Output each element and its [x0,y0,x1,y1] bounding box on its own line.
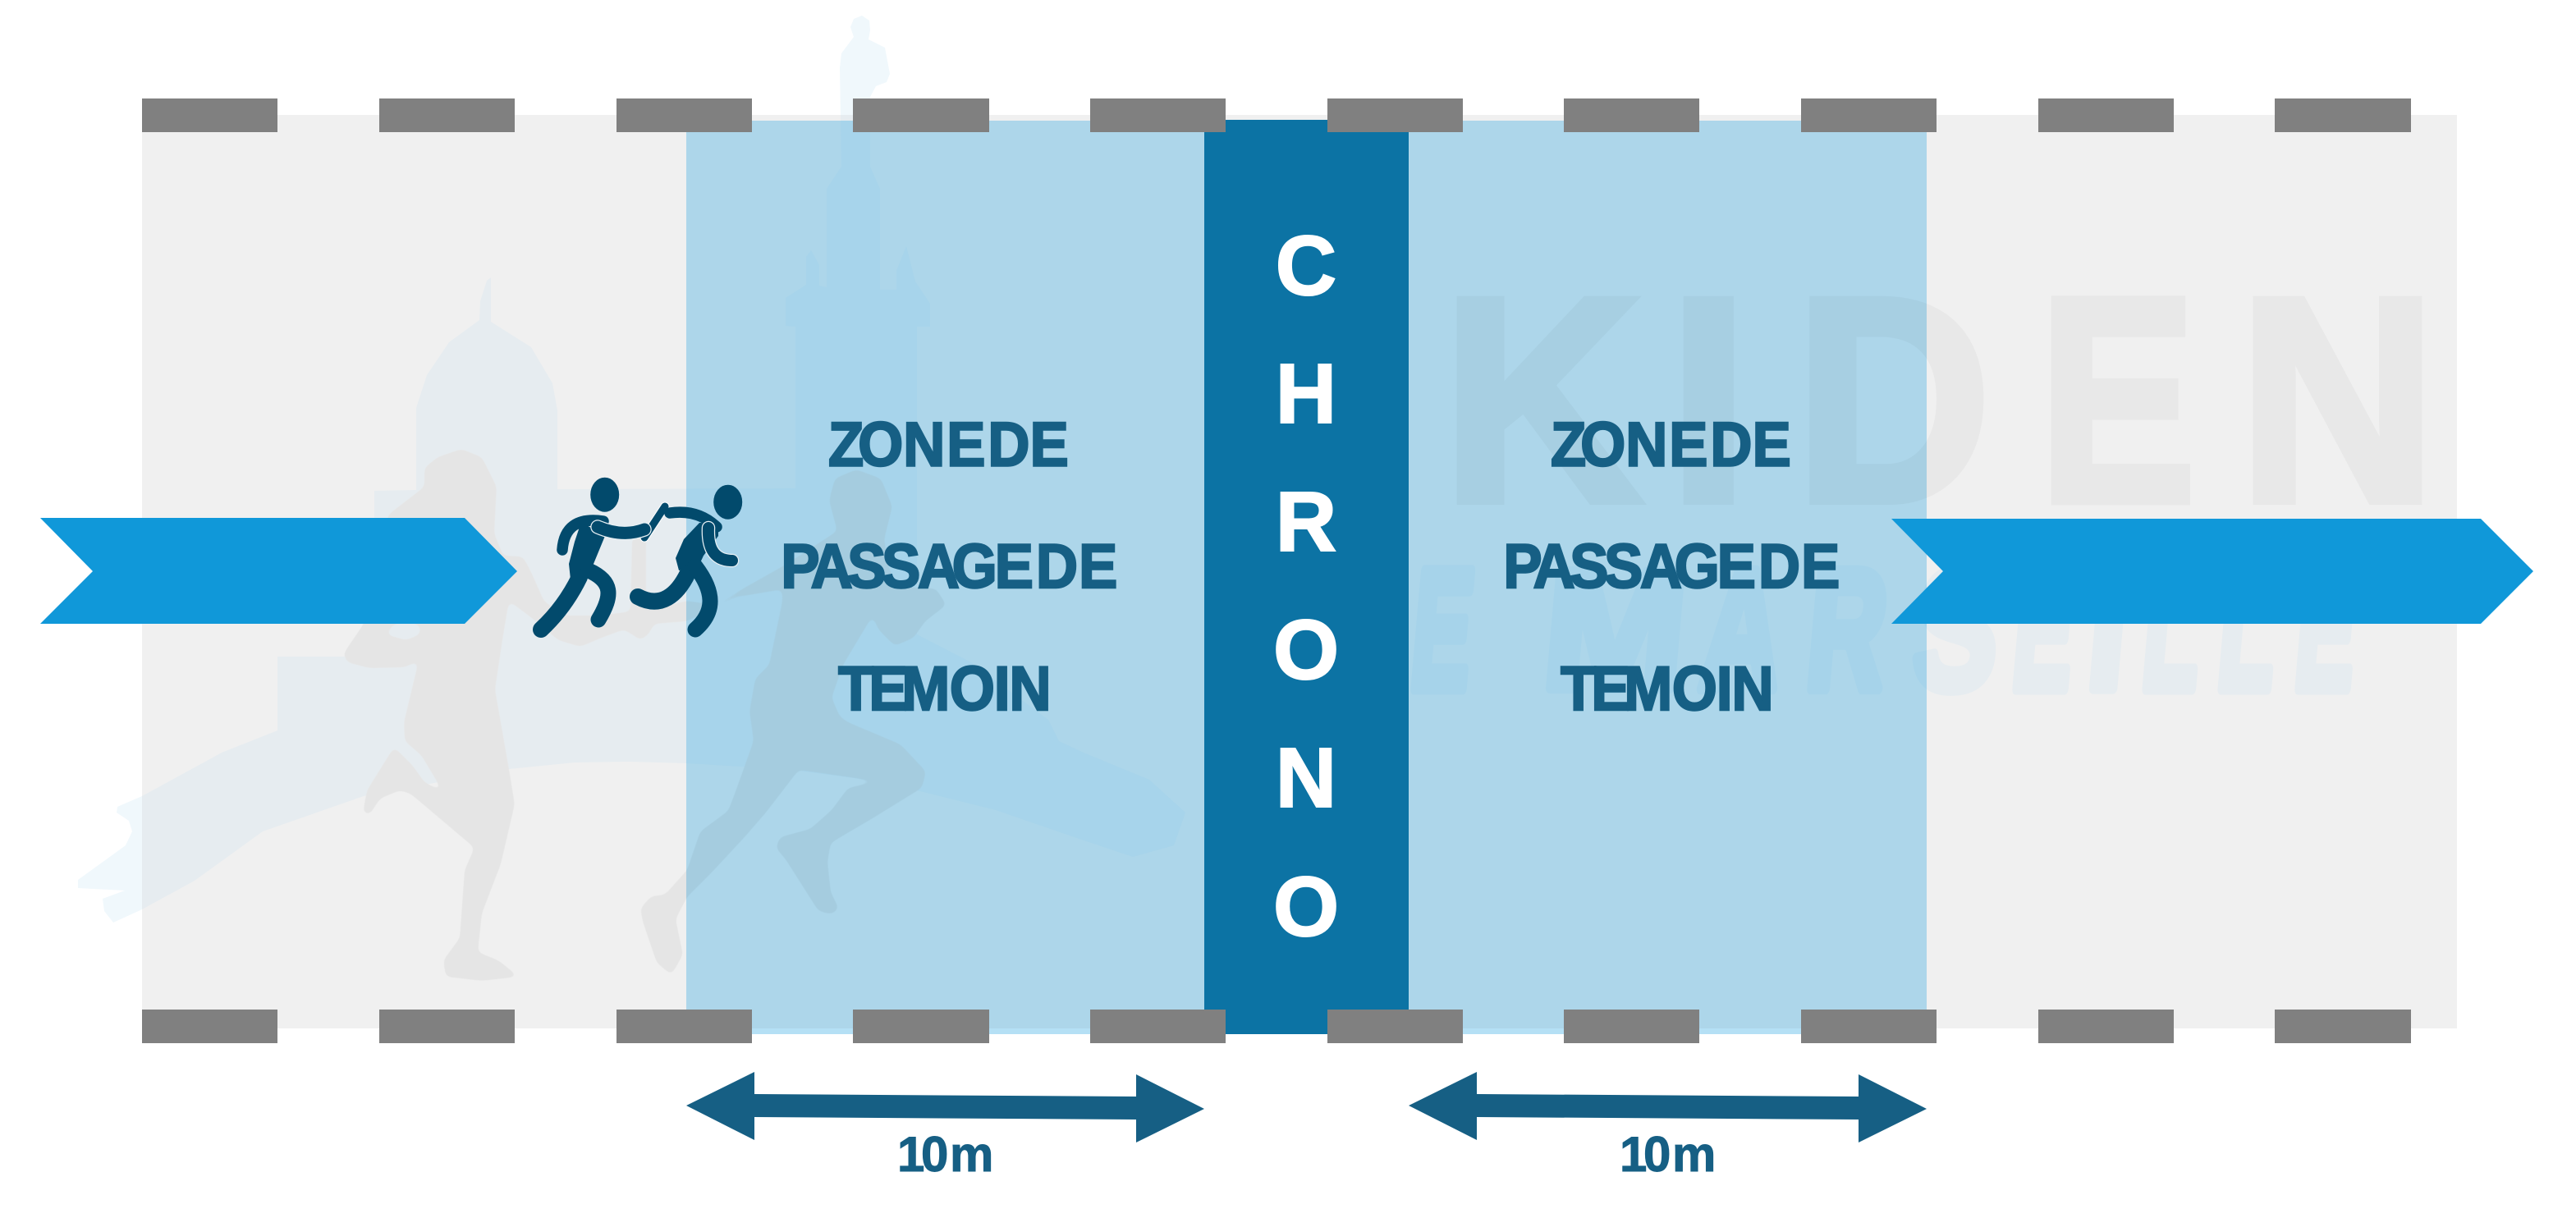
watermark: KIDEN: K [1442,237,1641,563]
arrow: incoming direction [40,518,517,624]
watermark: E MARSEILLE: A [1694,534,1790,726]
heading: CHRONO vertical letters: O [1273,602,1339,697]
text block: right zone label: TEMOIN [1561,654,1774,724]
watermark: E MARSEILLE [1405,533,2365,726]
panel: chrono band [1204,120,1409,1034]
watermark: E MARSEILLE: E [2006,534,2083,726]
watermark: basilica and swoosh [78,16,890,923]
heading: CHRONO vertical letters [1273,218,1339,954]
watermark: E MARSEILLE: R [1800,533,1895,725]
text block: left zone label: PASSAGE DE [781,532,1117,602]
top lane dashes [142,98,2411,132]
heading: CHRONO vertical letters: H [1276,346,1336,441]
panel: right baton passing zone [1409,121,1927,1034]
watermark: E MARSEILLE: I [2081,535,2136,726]
watermark: KIDEN: N [2239,238,2436,563]
icon: relay runners passing baton [541,478,742,630]
text block: right zone label [1503,410,1840,724]
text block: right zone label: ZONE DE [1551,410,1791,479]
watermark: E MARSEILLE: E [2289,534,2365,726]
heading: CHRONO vertical letters: O [1273,859,1339,954]
watermark: KIDEN [1442,237,2436,563]
bottom lane dashes [142,1010,2411,1043]
watermark: E MARSEILLE: L [2136,533,2209,726]
text block: right zone label: PASSAGE DE [1503,532,1840,602]
watermark: KIDEN: D [1795,237,1991,563]
watermark: KIDEN: I [1668,238,1749,563]
label: right 10m: 10m [1620,1127,1716,1182]
label: left 10m: 10m [897,1127,993,1182]
heading: CHRONO vertical letters: R [1276,474,1336,569]
text block: left zone label [781,410,1117,724]
watermark: E MARSEILLE: L [2212,533,2285,726]
watermark: E MARSEILLE: E [1405,534,1481,726]
watermark: KIDEN: E [2039,237,2196,563]
watermark: E MARSEILLE: M [1536,534,1695,726]
heading: CHRONO vertical letters: C [1276,218,1336,313]
watermark: runner silhouettes [343,449,947,981]
text block: left zone label: TEMOIN [838,654,1052,724]
arrow: left 10m dimension [686,1072,1204,1142]
text block: left zone label: ZONE DE [828,410,1069,479]
panel: left baton passing zone [686,121,1204,1034]
arrow: right 10m dimension [1409,1072,1927,1142]
arrow: outgoing direction [1891,519,2533,624]
track lane background [142,115,2457,1028]
watermark underlay: basilica and swoosh on white [78,16,1185,923]
heading: CHRONO vertical letters: N [1276,730,1336,825]
watermark: E MARSEILLE: S [1907,534,2007,725]
